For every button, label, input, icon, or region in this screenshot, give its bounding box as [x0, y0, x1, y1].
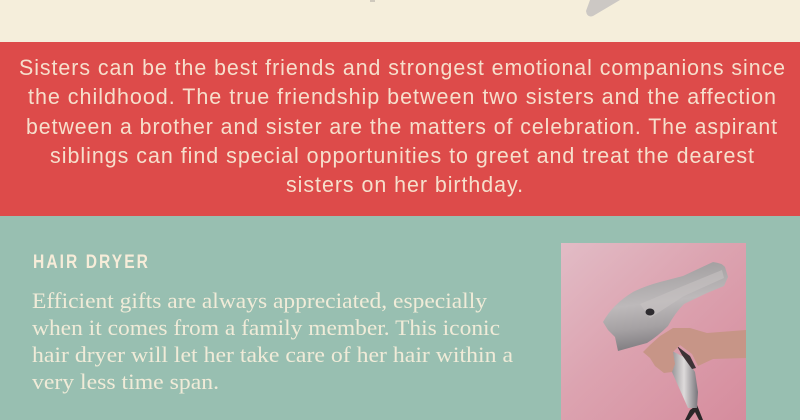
text block: hair dryer description	[32, 288, 513, 394]
dryer vent	[646, 308, 654, 316]
photo: hand holding hair dryer	[561, 243, 746, 420]
text block: introduction	[19, 55, 786, 197]
panel: top cream band	[0, 0, 800, 42]
handle grip	[677, 346, 696, 369]
panel: red intro band	[0, 42, 800, 216]
dryer highlight	[640, 270, 724, 318]
handle	[670, 350, 698, 408]
text block: hair dryer description: Efficient gifts are always appreciated, especially	[32, 288, 488, 313]
dryer body	[603, 262, 728, 351]
text block: introduction: siblings can find special opportunities to greet and treat the dearest	[50, 143, 755, 168]
decorative shape: top illustration remnant	[586, 0, 620, 16]
text block: introduction: the childhood. The true friendship between two sisters and the affection	[28, 84, 777, 109]
text block: hair dryer description: hair dryer will let her take care of her hair within a	[32, 342, 513, 367]
heading: hair dryer: HAIR DRYER	[33, 252, 150, 273]
text block: hair dryer description: very less time span.	[32, 369, 219, 394]
panel: hair dryer section	[0, 216, 800, 420]
text block: introduction: Sisters can be the best friends and strongest emotional companions since	[19, 55, 786, 80]
cord	[685, 405, 703, 420]
text block: hair dryer description: when it comes from a family member. This iconic	[32, 315, 500, 340]
decorative shape: small top mark	[370, 0, 375, 2]
arm and hand	[643, 328, 746, 373]
text block: introduction: between a brother and sister are the matters of celebration. The aspirant	[26, 114, 778, 139]
text block: introduction: sisters on her birthday.	[286, 172, 524, 197]
